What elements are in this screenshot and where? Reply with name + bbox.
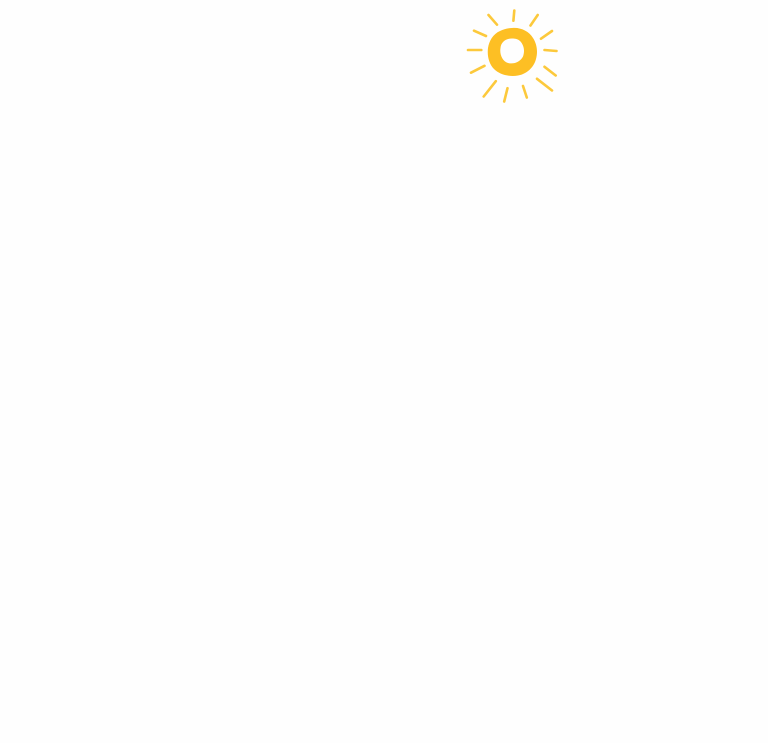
sun rays [468, 10, 556, 102]
sun ring [488, 28, 537, 76]
icon: sun [468, 10, 556, 102]
